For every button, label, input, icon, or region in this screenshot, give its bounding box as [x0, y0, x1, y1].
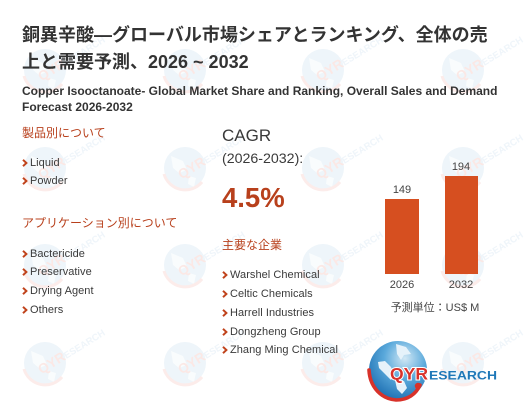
bar chart — [385, 161, 479, 314]
background watermarks: QYRESEARCH — [35, 129, 108, 182]
item: Warshel Chemical: Warshel Chemical — [230, 269, 320, 281]
subtitle: Copper Isooctanoate- Global Market Share and Ranking, Overall Sales and Demand — [22, 84, 497, 98]
item: Liquid: Liquid — [30, 157, 60, 169]
item: Dongzheng Group: Dongzheng Group — [230, 326, 321, 338]
CAGR period: (2026-2032): — [222, 151, 303, 167]
panel: applications — [22, 216, 177, 316]
value 194: 194 — [452, 161, 470, 173]
bar 2026 — [385, 199, 419, 274]
background watermarks: QYRESEARCH — [175, 31, 248, 84]
item: Others: Others — [30, 304, 63, 316]
swoosh — [369, 370, 420, 400]
wordmark: QYR — [390, 364, 428, 384]
background watermarks: QYRESEARCH — [313, 226, 386, 279]
background watermarks: QYRESEARCH — [35, 31, 108, 84]
background watermarks: QYRESEARCH — [35, 226, 108, 279]
background watermarks: QYRESEARCH — [175, 324, 248, 377]
background watermarks: QYRESEARCH — [175, 226, 248, 279]
year 2032: 2032 — [449, 279, 473, 291]
subtitle: Forecast 2026-2032 — [22, 100, 133, 114]
background watermarks: QYRESEARCH — [175, 129, 248, 182]
logo: QYResearch — [367, 341, 497, 402]
unit label: 予測単位：US$ M — [391, 300, 479, 314]
globe — [369, 341, 427, 399]
background watermarks: QYRESEARCH — [453, 129, 525, 182]
item: Drying Agent: Drying Agent — [30, 285, 94, 297]
item: Powder: Powder — [30, 175, 68, 187]
heading: product: 製品別について — [22, 126, 106, 140]
background watermarks: QYRESEARCH — [453, 31, 525, 84]
CAGR value: 4.5% — [222, 182, 285, 213]
value 149: 149 — [393, 184, 411, 196]
item: Harrell Industries: Harrell Industries — [230, 307, 314, 319]
panel: CAGR — [222, 126, 303, 213]
background watermarks: QYRESEARCH — [313, 324, 386, 377]
title: 銅異辛酸—グローバル市場シェアとランキング、全体の売 — [22, 25, 488, 45]
subtitle — [22, 84, 497, 114]
item: Celtic Chemicals: Celtic Chemicals — [230, 288, 313, 300]
background watermarks: QYRESEARCH — [313, 129, 386, 182]
item: Zhang Ming Chemical: Zhang Ming Chemical — [230, 344, 338, 356]
bar 2032 — [445, 176, 478, 274]
heading: application: アプリケーション別について — [22, 216, 177, 230]
heading: companies: 主要な企業 — [222, 238, 282, 252]
title: 上と需要予測、2026 ~ 2032 — [22, 52, 249, 72]
item: Bactericide: Bactericide — [30, 248, 85, 260]
logo: QYResearch: ESEARCH — [429, 370, 497, 382]
background watermarks: QYRESEARCH — [453, 226, 525, 279]
title — [22, 25, 488, 72]
year 2026: 2026 — [390, 279, 414, 291]
background watermarks: QYRESEARCH — [453, 324, 525, 377]
CAGR label: CAGR — [222, 126, 271, 145]
item: Preservative: Preservative — [30, 266, 92, 278]
panel: key companies — [222, 238, 338, 356]
background watermarks: QYRESEARCH — [313, 31, 386, 84]
background watermarks: QYRESEARCH — [35, 324, 108, 377]
panel: product types — [22, 126, 106, 187]
